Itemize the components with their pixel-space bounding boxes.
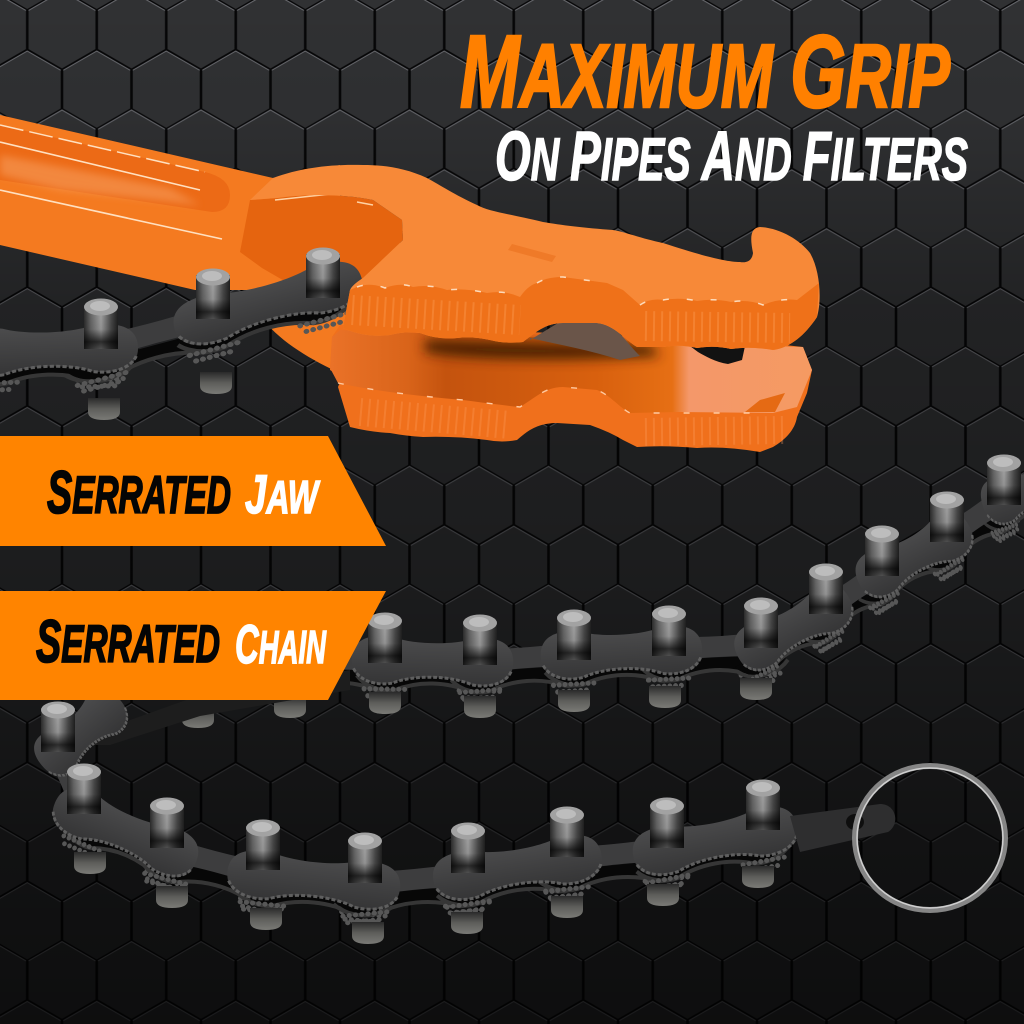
jaw serrated face — [343, 277, 819, 350]
title: maximum grip: MAXIMUM GRIP — [460, 14, 951, 129]
label: chain: CHAIN — [235, 613, 326, 675]
split key ring — [855, 766, 1005, 910]
banner: serrated jaw — [0, 436, 386, 546]
gap between jaw tips — [690, 346, 745, 364]
upper chain segment attached to wrench — [0, 248, 368, 420]
label: serrated: SERRATED — [36, 608, 220, 675]
lower chain with end tab — [27, 670, 895, 944]
wrench: handle and fork body — [0, 115, 403, 375]
label: jaw: JAW — [245, 463, 320, 525]
wrench: lower jaw — [330, 325, 812, 452]
subtitle: on pipes and filters: ON PIPES AND FILTERS — [495, 117, 968, 195]
label: serrated: SERRATED — [47, 459, 231, 526]
banner: serrated chain — [0, 591, 386, 700]
chain end tab with hole — [790, 804, 895, 852]
jaw inner surface — [330, 330, 812, 413]
right and middle chain — [182, 451, 1024, 728]
gray pipe disc between jaws — [530, 320, 640, 360]
wrench: upper serrated jaw with hook — [250, 165, 820, 350]
